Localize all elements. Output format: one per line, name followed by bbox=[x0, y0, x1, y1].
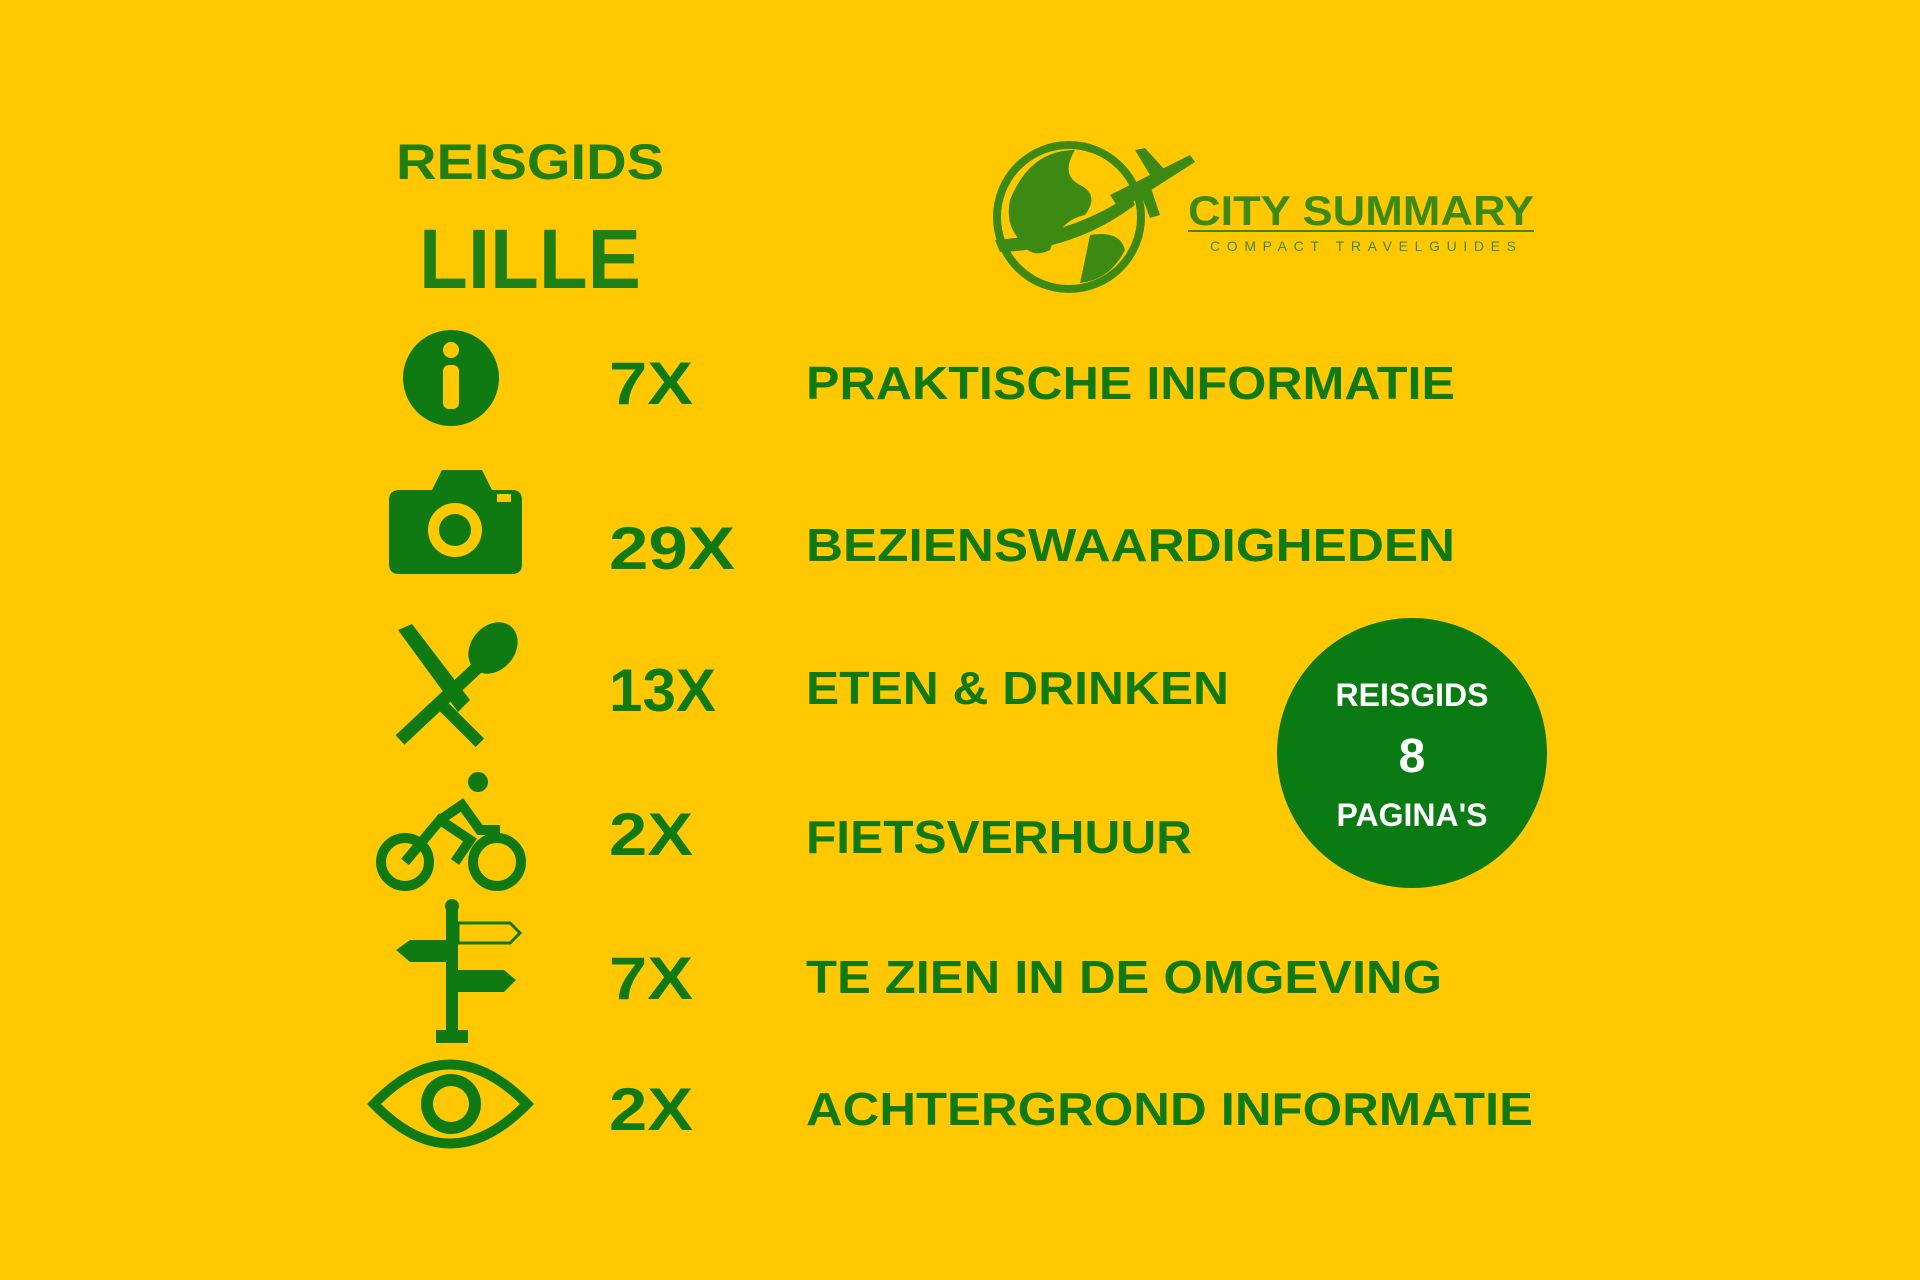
labels: ACHTERGROND INFORMATIE bbox=[806, 1083, 1533, 1135]
icon: camera bbox=[389, 470, 522, 574]
badge: 8 pages: PAGINA'S bbox=[1336, 797, 1488, 833]
labels: FIETSVERHUUR bbox=[806, 811, 1192, 863]
badge: 8 pages: 8 bbox=[1399, 730, 1425, 783]
icon: info bbox=[403, 330, 499, 426]
title: lille: LILLE bbox=[419, 212, 641, 306]
labels bbox=[806, 357, 1533, 1135]
logo subtitle: COMPACT TRAVELGUIDES bbox=[1210, 238, 1516, 254]
labels: ETEN & DRINKEN bbox=[806, 662, 1229, 714]
title: reisgids: REISGIDS bbox=[396, 134, 664, 190]
icon: eye bbox=[374, 1064, 527, 1144]
icon: signpost bbox=[396, 899, 520, 1043]
icon: globe with plane bbox=[995, 145, 1195, 289]
labels: TE ZIEN IN DE OMGEVING bbox=[806, 951, 1442, 1003]
numbers: 2X bbox=[609, 1076, 693, 1143]
badge: 8 pages bbox=[1277, 618, 1547, 888]
badge: 8 pages: REISGIDS bbox=[1336, 677, 1488, 713]
icon: knife and spoon bbox=[398, 612, 528, 747]
numbers: 7X bbox=[609, 350, 693, 417]
icon: cyclist bbox=[381, 772, 521, 886]
logo text: CITY SUMMARY bbox=[1188, 187, 1534, 234]
numbers bbox=[609, 350, 735, 1143]
numbers: 29X bbox=[609, 515, 735, 582]
logo: city summary bbox=[995, 145, 1534, 289]
labels: BEZIENSWAARDIGHEDEN bbox=[806, 519, 1455, 571]
numbers: 7X bbox=[609, 945, 693, 1012]
labels: PRAKTISCHE INFORMATIE bbox=[806, 357, 1455, 409]
numbers: 2X bbox=[609, 801, 693, 868]
numbers: 13X bbox=[609, 657, 716, 724]
